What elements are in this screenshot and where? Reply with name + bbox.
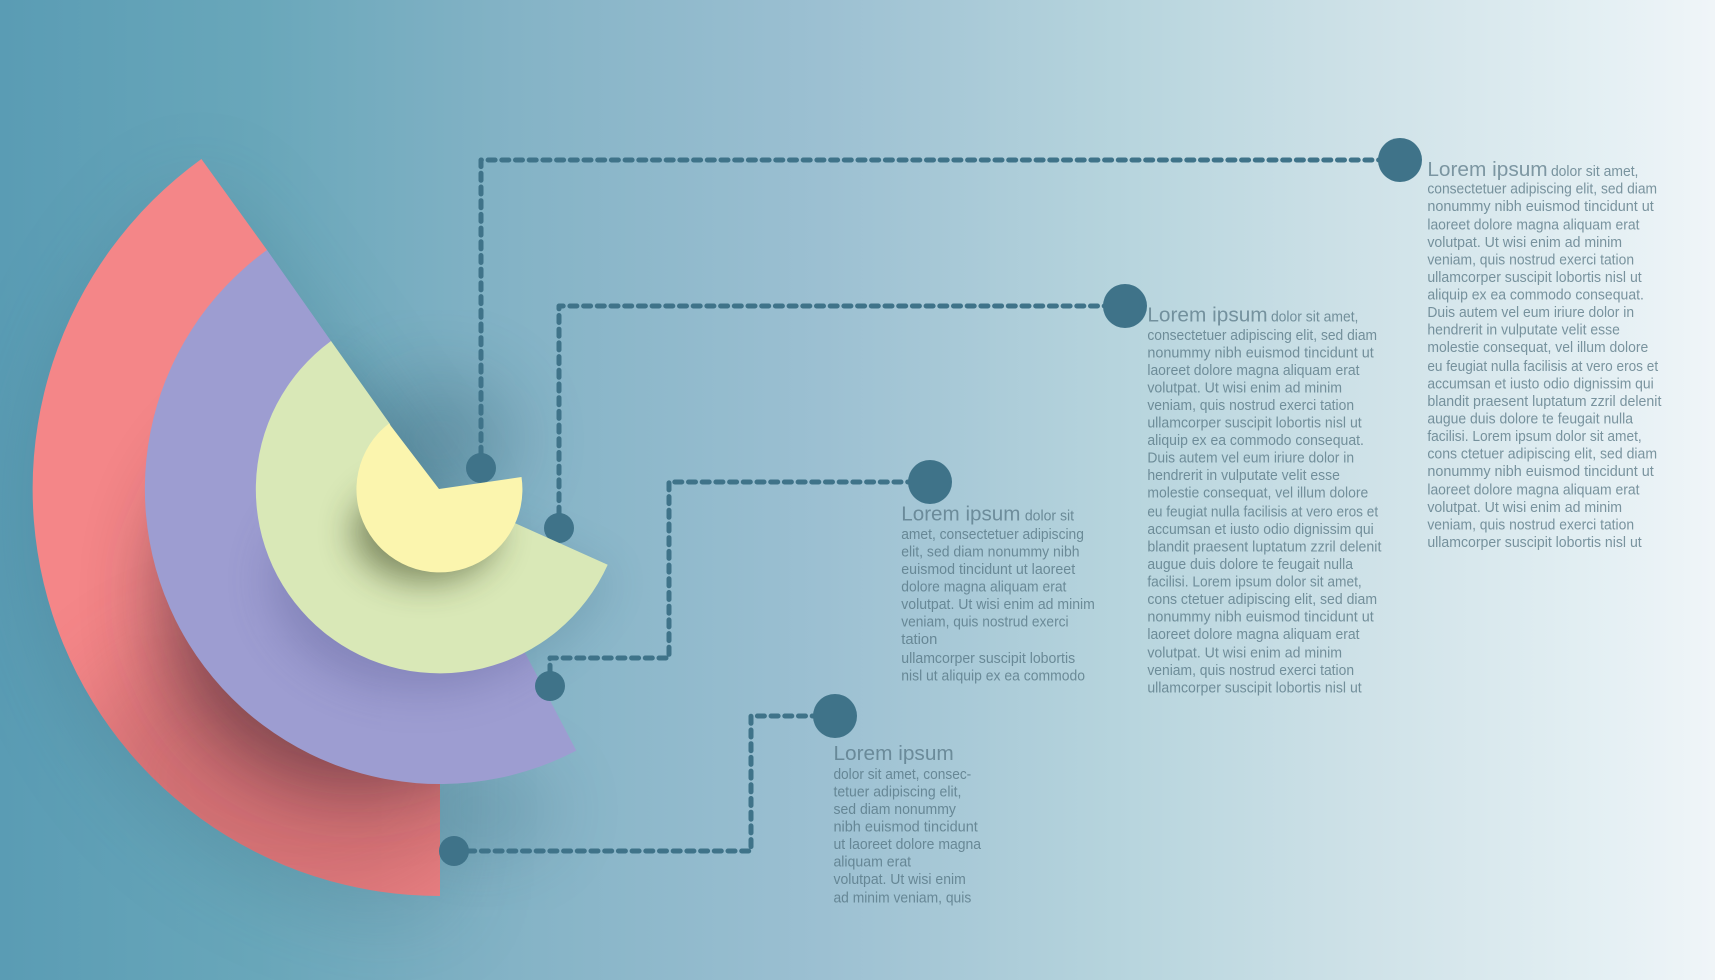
- text block 4: volutpat. Ut wisi enim: [833, 872, 966, 888]
- text block 4: sed diam nonummy: [833, 802, 957, 818]
- connector 3: [550, 482, 930, 686]
- text block 2: facilisi. Lorem ipsum dolor sit amet,: [1147, 574, 1362, 590]
- text block 2: hendrerit in vulputate velit esse: [1147, 468, 1340, 484]
- sector: red outer ring: [32, 159, 440, 896]
- text block 3: veniam, quis nostrud exerci: [901, 615, 1069, 631]
- text block 1: laoreet dolore magna aliquam erat: [1427, 218, 1640, 234]
- text block 3: Lorem ipsum: [901, 504, 1020, 526]
- text block 1: eu feugiat nulla facilisis at vero eros et: [1427, 359, 1658, 375]
- text block 1: nonummy nibh euismod tincidunt ut: [1427, 199, 1654, 215]
- text block 3: [901, 504, 1095, 684]
- text block 4: Lorem ipsum: [833, 743, 954, 765]
- text block 2: accumsan et iusto odio dignissim qui: [1147, 522, 1374, 538]
- dot: connector 3 start: [535, 671, 565, 701]
- text block 1: veniam, quis nostrud exerci tation: [1427, 253, 1634, 269]
- connector 2: [559, 306, 1125, 528]
- text block 1: dolor sit amet,: [1551, 164, 1638, 180]
- text block 1: nonummy nibh euismod tincidunt ut: [1427, 464, 1654, 480]
- dot: connector 1 start: [466, 453, 496, 483]
- text block 1: facilisi. Lorem ipsum dolor sit amet,: [1427, 429, 1642, 445]
- text block 2: consectetuer adipiscing elit, sed diam: [1147, 328, 1377, 344]
- text block 3: euismod tincidunt ut laoreet: [901, 562, 1075, 578]
- text block 2: volutpat. Ut wisi enim ad minim: [1147, 381, 1342, 397]
- text block 4: ad minim veniam, quis: [833, 890, 971, 906]
- text block 2: [1147, 305, 1381, 696]
- text block 3: nisl ut aliquip ex ea commodo: [901, 668, 1085, 684]
- text block 2: cons ctetuer adipiscing elit, sed diam: [1147, 592, 1377, 608]
- text block 3: volutpat. Ut wisi enim ad minim: [901, 597, 1095, 613]
- text block 2: volutpat. Ut wisi enim ad minim: [1147, 645, 1342, 661]
- text block 1: Lorem ipsum: [1427, 159, 1548, 181]
- text block 2: Duis autem vel eum iriure dolor in: [1147, 451, 1354, 467]
- text block 3: amet, consectetuer adipiscing: [901, 527, 1084, 543]
- text block 1: accumsan et iusto odio dignissim qui: [1427, 376, 1654, 392]
- text block 2: nonummy nibh euismod tincidunt ut: [1147, 609, 1374, 625]
- text block 4: nibh euismod tincidunt: [833, 819, 978, 835]
- text block 4: ut laoreet dolore magna: [833, 837, 982, 853]
- text block 3: tation: [901, 632, 937, 648]
- text block 2: molestie consequat, vel illum dolore: [1147, 486, 1368, 502]
- text block 1: consectetuer adipiscing elit, sed diam: [1427, 182, 1657, 198]
- text block 2: ullamcorper suscipit lobortis nisl ut: [1147, 680, 1362, 696]
- text block 1: blandit praesent luptatum zzril delenit: [1427, 394, 1661, 410]
- text block 2: eu feugiat nulla facilisis at vero eros et: [1147, 504, 1378, 520]
- text block 1: volutpat. Ut wisi enim ad minim: [1427, 500, 1622, 516]
- text block 1: hendrerit in vulputate velit esse: [1427, 323, 1620, 339]
- pie shadows on background: [37, 181, 614, 918]
- connector 4: [454, 716, 835, 851]
- text block 3: ullamcorper suscipit lobortis: [901, 651, 1075, 667]
- text block 1: ullamcorper suscipit lobortis nisl ut: [1427, 535, 1642, 551]
- text block 1: laoreet dolore magna aliquam erat: [1427, 482, 1640, 498]
- text block 2: veniam, quis nostrud exerci tation: [1147, 398, 1354, 414]
- text block 2: veniam, quis nostrud exerci tation: [1147, 663, 1354, 679]
- text block 1: [1427, 159, 1661, 551]
- text block 2: aliquip ex ea commodo consequat.: [1147, 433, 1364, 449]
- node circle 3: [908, 460, 952, 504]
- text block 2: blandit praesent luptatum zzril delenit: [1147, 539, 1381, 555]
- text block 1: Duis autem vel eum iriure dolor in: [1427, 305, 1634, 321]
- text block 1: molestie consequat, vel illum dolore: [1427, 340, 1648, 356]
- text block 1: volutpat. Ut wisi enim ad minim: [1427, 235, 1622, 251]
- text block 3: dolore magna aliquam erat: [901, 580, 1066, 596]
- text block 2: laoreet dolore magna aliquam erat: [1147, 363, 1360, 379]
- text block 3: dolor sit: [1025, 509, 1074, 525]
- text block 1: cons ctetuer adipiscing elit, sed diam: [1427, 446, 1657, 462]
- dot: connector 2 start: [544, 513, 574, 543]
- text block 1: aliquip ex ea commodo consequat.: [1427, 288, 1644, 304]
- text block 4: tetuer adipiscing elit,: [833, 784, 961, 800]
- text block 4: aliquam erat: [833, 854, 911, 870]
- text block 4: [833, 743, 982, 906]
- text block 4: dolor sit amet, consec-: [833, 767, 971, 783]
- sector: green ring: [256, 341, 608, 673]
- node circle 1: [1378, 138, 1422, 182]
- sector: purple ring: [145, 250, 576, 784]
- text block 2: dolor sit amet,: [1271, 310, 1358, 326]
- text block 2: ullamcorper suscipit lobortis nisl ut: [1147, 416, 1362, 432]
- text block 2: Lorem ipsum: [1147, 305, 1268, 327]
- node circle 2: [1103, 284, 1147, 328]
- node circle 4: [813, 694, 857, 738]
- text block 1: veniam, quis nostrud exerci tation: [1427, 517, 1634, 533]
- text block 2: nonummy nibh euismod tincidunt ut: [1147, 346, 1374, 362]
- text block 2: augue duis dolore te feugait nulla: [1147, 557, 1354, 573]
- dot: connector 4 start: [439, 836, 469, 866]
- sector: yellow core: [356, 424, 522, 572]
- text block 3: elit, sed diam nonummy nibh: [901, 545, 1080, 561]
- text block 1: augue duis dolore te feugait nulla: [1427, 411, 1634, 427]
- text block 2: laoreet dolore magna aliquam erat: [1147, 627, 1360, 643]
- text block 1: ullamcorper suscipit lobortis nisl ut: [1427, 270, 1642, 286]
- connector 1: [481, 160, 1400, 468]
